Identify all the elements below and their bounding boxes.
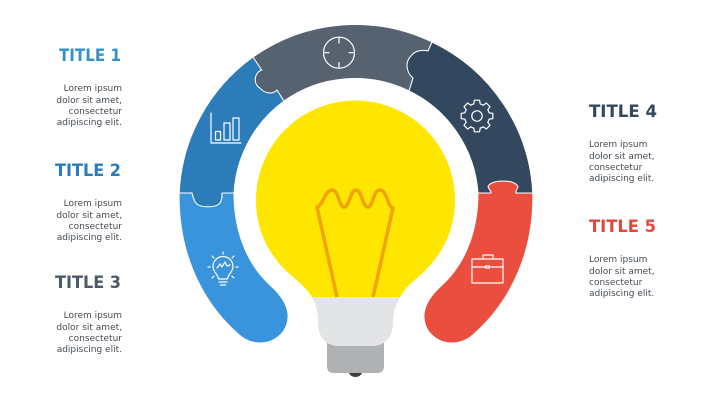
text block: title 1: TITLE 1 <box>59 46 121 66</box>
text block: title 4: consectetur <box>589 163 643 173</box>
filament <box>317 190 393 297</box>
panel: segment 2 light blue <box>179 193 288 343</box>
panel: segment 1 dark blue <box>179 57 284 207</box>
text block: title 1: adipiscing elit. <box>57 118 122 128</box>
text block: title 2: dolor sit amet, <box>56 211 122 221</box>
panel: segment 2 grey <box>253 24 432 101</box>
text block: title 3: TITLE 3 <box>55 273 121 293</box>
text block: title 4: TITLE 4 <box>589 102 657 122</box>
text block: title 2: adipiscing elit. <box>57 233 122 243</box>
text block: title 2: TITLE 2 <box>55 161 121 181</box>
text block: title 5: adipiscing elit. <box>589 289 654 299</box>
panel: segment 5 red <box>424 181 533 343</box>
text block: title 2: consectetur <box>69 222 122 232</box>
text block: title 1: dolor sit amet, <box>56 96 122 106</box>
text block: title 4: adipiscing elit. <box>589 174 654 184</box>
text block: title 3: Lorem ipsum <box>64 311 122 321</box>
text block: title 4: dolor sit amet, <box>589 152 655 162</box>
text block: title 2 <box>55 161 122 243</box>
icon: gear <box>461 100 493 132</box>
text block: title 3: dolor sit amet, <box>56 323 122 333</box>
text block: title 3 <box>55 273 122 355</box>
bulb glass <box>256 101 455 297</box>
bulb base socket <box>327 340 384 373</box>
bulb collar <box>312 297 400 346</box>
text block: title 2: Lorem ipsum <box>64 199 122 209</box>
icon: bar chart <box>211 113 241 143</box>
icon: target <box>324 37 354 68</box>
icon: briefcase <box>472 255 503 283</box>
text block: title 5: dolor sit amet, <box>589 267 655 277</box>
text block: title 1: consectetur <box>69 107 122 117</box>
text block: title 5: TITLE 5 <box>589 217 656 237</box>
text block: title 4 <box>589 102 657 184</box>
bulb tip <box>349 373 362 377</box>
panel: segment 4 navy <box>407 42 533 193</box>
text block: title 3: consectetur <box>69 334 122 344</box>
icon: lightbulb idea <box>208 252 238 285</box>
text block: title 3: adipiscing elit. <box>57 345 122 355</box>
bulb <box>256 101 455 377</box>
text block: title 1 <box>56 46 122 128</box>
text block: title 1: Lorem ipsum <box>64 84 122 94</box>
text block: title 4: Lorem ipsum <box>589 140 647 150</box>
text block: title 5: Lorem ipsum <box>589 255 647 265</box>
text block: title 5 <box>589 217 656 299</box>
text block: title 5: consectetur <box>589 278 643 288</box>
